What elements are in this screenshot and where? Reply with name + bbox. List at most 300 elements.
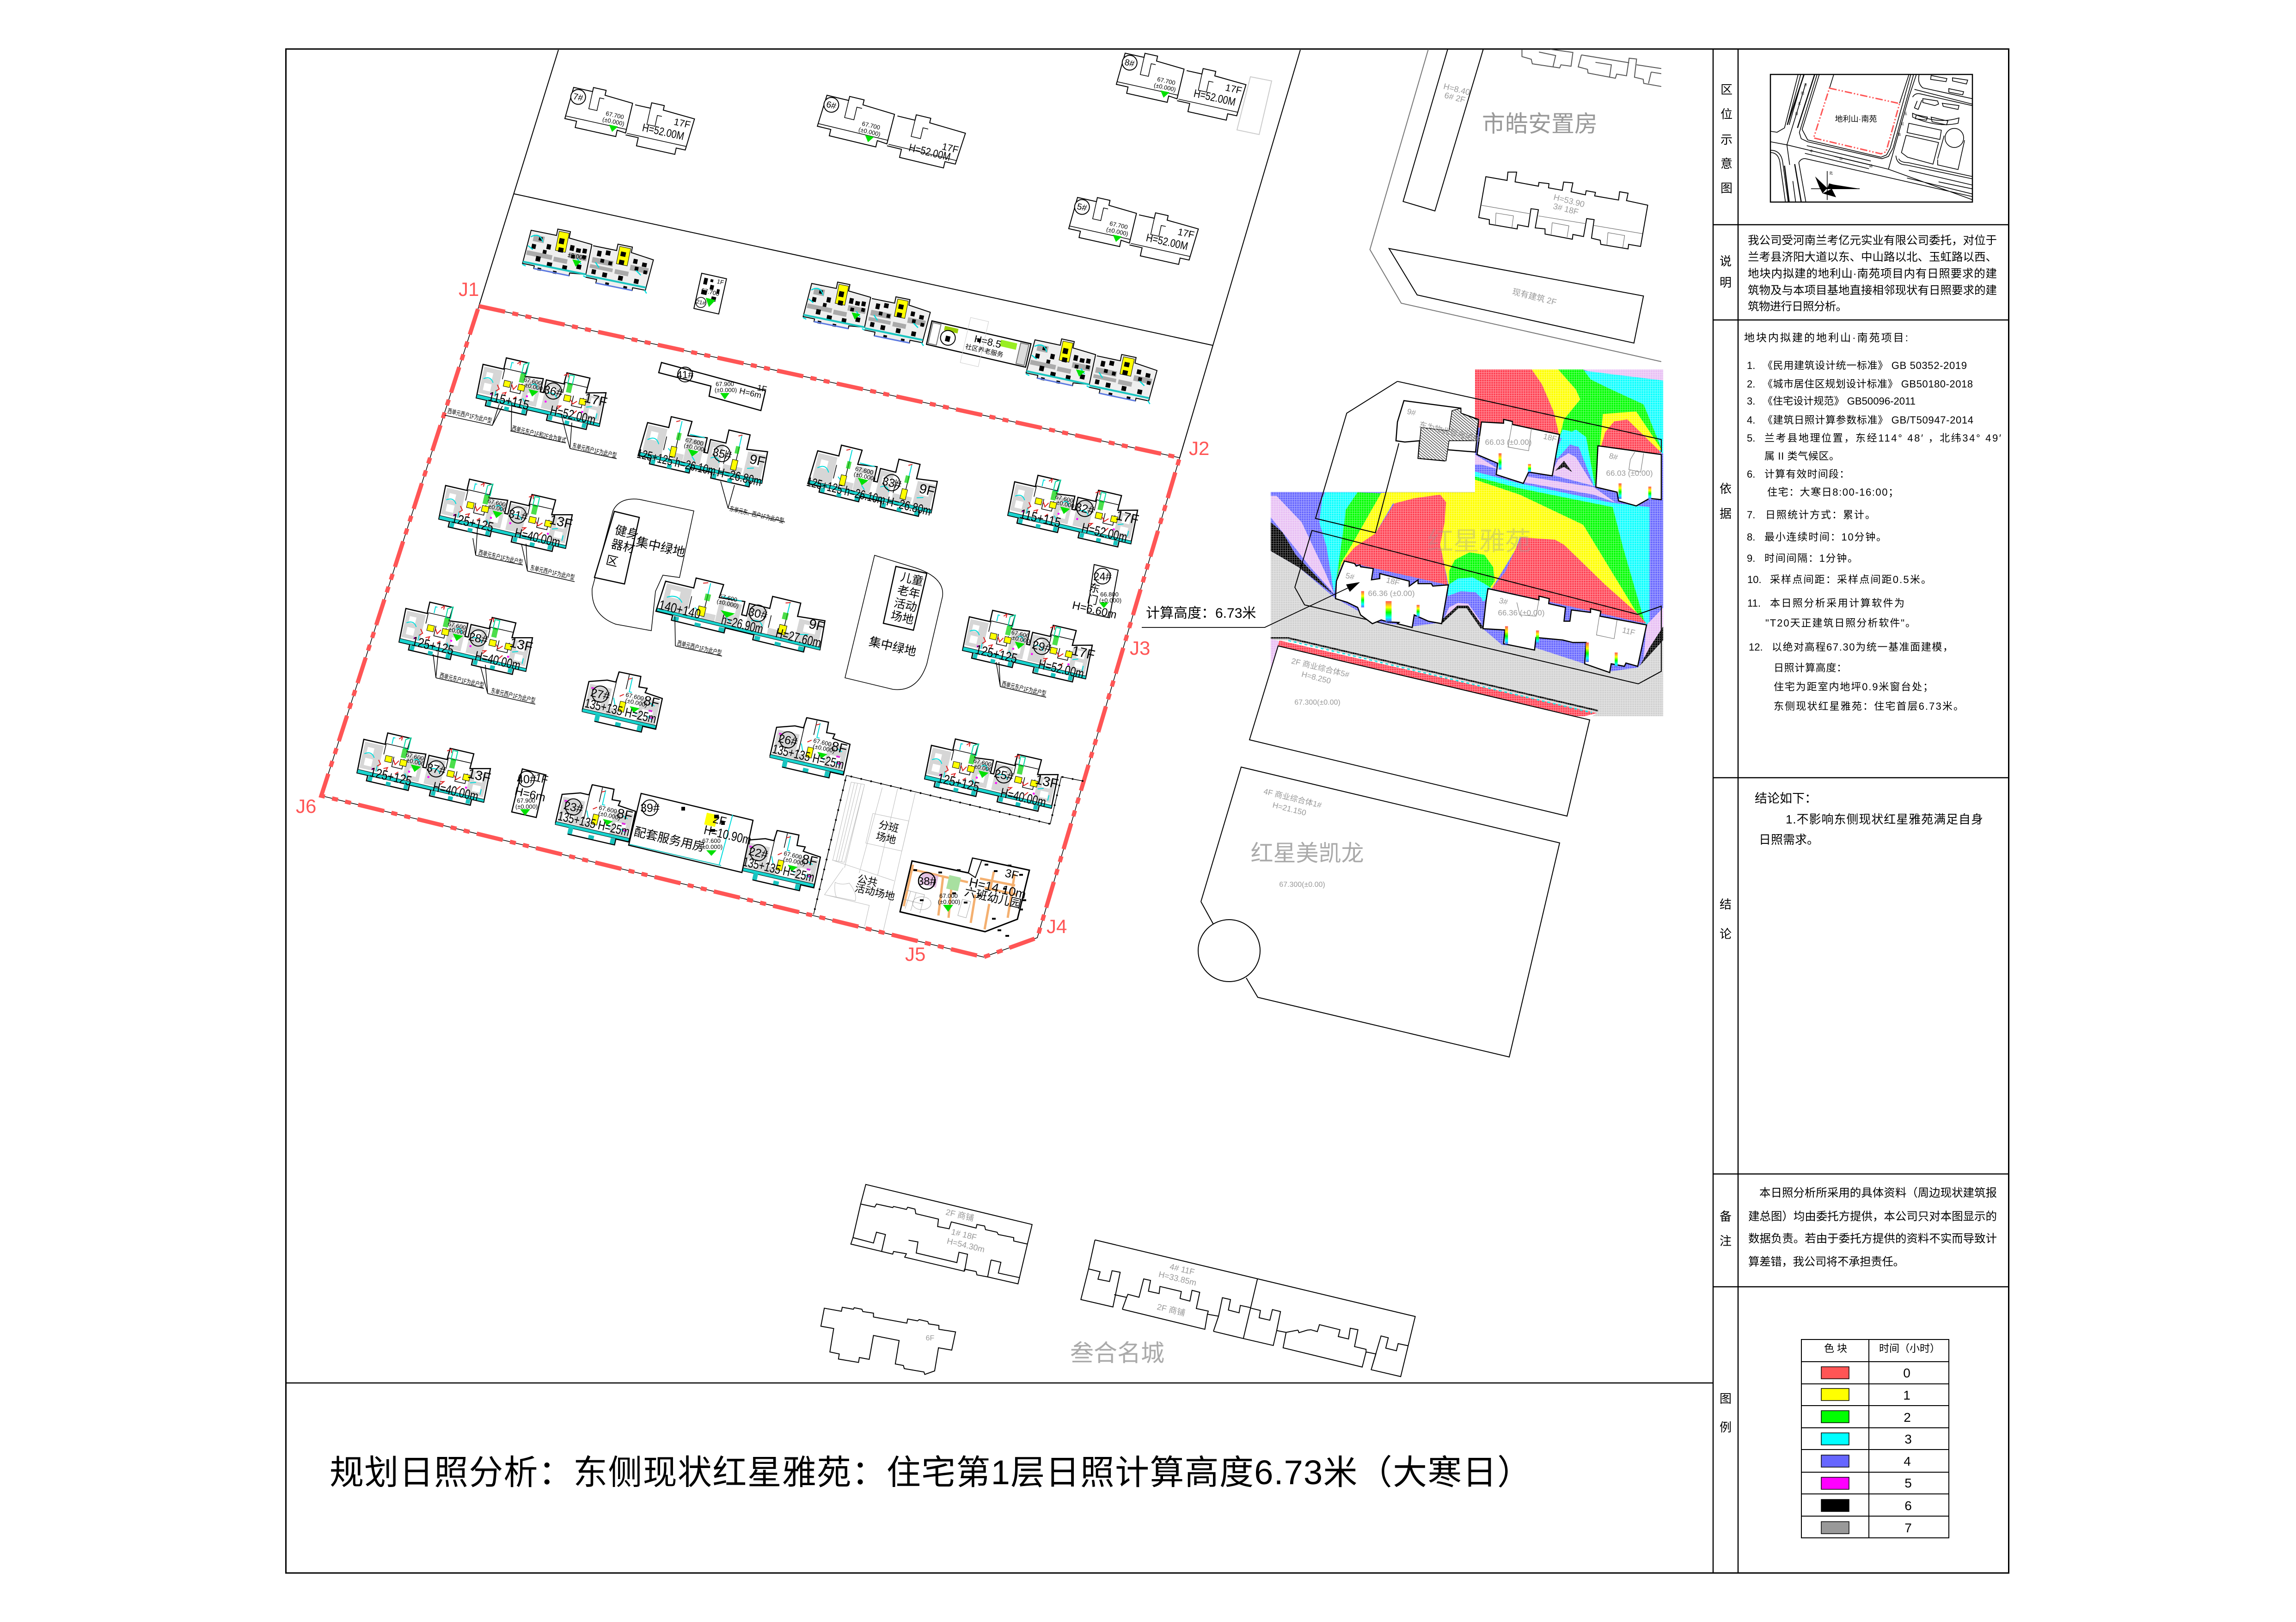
building 40#: H=6m (514, 785, 547, 804)
building 5# north: H=52.00M (1145, 232, 1189, 253)
residential building 37#: 13F (466, 766, 492, 786)
remarks: 数据负责。若由于委托方提供的资料不实而导致计 (1748, 1232, 1997, 1245)
grey outbuilding (1237, 77, 1272, 135)
drawing title: 规划日照分析：东侧现状红星雅苑：住宅第1层日照计算高度6.73米（大寒日） (330, 1453, 1531, 1492)
red land boundary J1 to J6 (321, 306, 1180, 957)
road labels: 济 (1804, 83, 1807, 87)
residential building 36#: H=52.00m (549, 403, 597, 428)
road labels: 路 (1898, 132, 1901, 136)
residential building 25#: 125+125 (936, 771, 981, 795)
residential building 35#: (±0.000) (683, 442, 707, 454)
sidebar row labels: 依 (1720, 482, 1732, 496)
commercial 1# name: 4F 商业综合体1# (1263, 787, 1322, 810)
conclusion: 日照需求。 (1759, 833, 1819, 847)
residential building 35#: 67.600 (685, 436, 704, 447)
road labels: 大 (1798, 101, 1801, 105)
boundary point labels (296, 278, 1209, 965)
green area west: fitness: 区 (605, 553, 619, 569)
building 24#: 66.800 (1100, 591, 1119, 598)
residential building 29#: 67.600 (1010, 629, 1030, 639)
building 5# north: 5# (1076, 202, 1088, 214)
building 8#: (±0.000) (1153, 81, 1176, 93)
residential building 27# (581, 665, 667, 735)
residential building 28#: H=40.00m (473, 649, 522, 673)
basis list: 以绝对高程67.30为统一基准面建模， (1772, 641, 1953, 653)
building 39# service house: 配套服务用房 (633, 824, 706, 854)
residential building 29#: 29# (1031, 639, 1053, 655)
residential building 26#: 135+135 H=25m (771, 742, 845, 772)
map north compass (1811, 171, 1860, 200)
remarks: 建总图）均由委托方提供，本公司只对本图显示的 (1748, 1210, 1997, 1223)
residential building 28#: 13F (508, 635, 534, 655)
callout texts: 西单元东户1F为此户型 (1001, 680, 1047, 697)
callout texts: 西单元西户1F为此户型 (447, 407, 493, 424)
building 24#: H=6.60m (1071, 599, 1118, 621)
rainbow time bars (1361, 453, 1651, 667)
residential building 37# (355, 728, 496, 808)
commercial 5# height: H=8.250 (1301, 670, 1332, 686)
basis list: 《建筑日照计算参数标准》 GB/T50947-2014 (1763, 414, 1973, 426)
building 7#: 7# (572, 92, 584, 104)
commercial 5# elevation: 67.300(±0.00) (1294, 699, 1341, 707)
building 6# labels: 67.700 (861, 120, 881, 131)
commercial 5# name: 2F 商业综合体5# (1291, 657, 1350, 680)
building 8# east (1596, 446, 1661, 506)
residential building 30# (655, 571, 829, 656)
map building labels: 5# (1345, 571, 1355, 582)
residential building 26# (768, 711, 854, 781)
row building east (1025, 333, 1159, 404)
callout texts: 西单元西户1F为此户型 (677, 639, 722, 657)
swatch 4 (1821, 1455, 1849, 1467)
remarks: 算差错，我公司将不承担责任。 (1748, 1255, 1904, 1268)
callout texts (439, 407, 1047, 704)
residential building 30#: h=26.90m (720, 613, 765, 637)
green area west: fitness: 健身 (613, 523, 640, 542)
label: 2F shop 2: 2F 商铺 (1156, 1302, 1186, 1318)
residential building 32#: 115+115 (1018, 507, 1062, 530)
residential building 22# (739, 824, 825, 894)
swatch 1 (1821, 1389, 1849, 1401)
basis list: 本日照分析采用计算软件为 (1770, 597, 1904, 609)
road labels: 虹 (1901, 122, 1904, 126)
residential building 25# (922, 734, 1063, 814)
residential building 31#: 125+125 (450, 511, 495, 535)
residential building 33#: (±0.000) (853, 470, 876, 482)
row building west (521, 223, 655, 294)
site name: 地利山·南苑 (1835, 115, 1877, 123)
residential building 33#: H=26.80m (885, 494, 933, 518)
residential building 36#: 67.600 (523, 376, 543, 387)
residential building 28#: 125+125 (410, 634, 455, 658)
building 24#: (±0.000) (1099, 597, 1121, 604)
building 24#: 门 (1086, 593, 1099, 607)
label: 4# height: H=33.85m (1157, 1270, 1197, 1288)
parcel outlines (1295, 381, 1661, 684)
property management hatch (1418, 408, 1479, 461)
building 9# (1396, 401, 1479, 461)
building 38# kindergarten: (±0.000) (938, 898, 960, 905)
building 39# service house: 2F (711, 812, 728, 828)
legend hour values: 4 (1904, 1454, 1911, 1468)
swatch 3 (1821, 1433, 1849, 1445)
commercial 1# height: H=21.150 (1272, 800, 1307, 817)
basis list: 东侧现状红星雅苑：住宅首层6.73米。 (1774, 700, 1964, 712)
residential building 29# (960, 605, 1100, 685)
residential building 31#: ±0.000 (488, 503, 507, 514)
residential building 37#: ±0.000 (406, 756, 425, 768)
residential building 27#: (±0.000) (625, 697, 648, 708)
legend hour values: 2 (1904, 1410, 1911, 1425)
residential building 31#: H=40.00m (513, 526, 562, 550)
building 24#: 东 (1088, 581, 1101, 595)
label: project name east: 市皓安置房 (1482, 111, 1598, 137)
residential building 37#: 37# (425, 761, 447, 778)
residential building 30#: 140+140 (657, 598, 702, 622)
callout texts: 东单元西户1F为此户型 (572, 442, 618, 459)
boundary point labels: J1 (459, 278, 479, 300)
building 40#: 1F (534, 771, 549, 786)
east neighbourhood parcel and buildings (1370, 49, 1661, 362)
green area west: fitness: 器材 (610, 537, 637, 556)
boundary point labels: J5 (905, 943, 925, 965)
residential building 32#: 67.600 (1054, 493, 1074, 504)
residential building 27#: 8F (642, 693, 661, 711)
commercial complex title: 红星美凯龙 (1250, 841, 1364, 866)
building 6# labels: (±0.000) (858, 126, 881, 138)
legend head: 色 块 (1824, 1343, 1847, 1354)
sidebar row labels: 明 (1720, 276, 1732, 289)
basis list: 4. (1747, 414, 1755, 426)
basis list: 12. (1749, 641, 1763, 653)
map building labels: 11F (1621, 626, 1636, 637)
building 21# (694, 273, 727, 314)
building 41#: 67.900 (716, 381, 734, 387)
residential building 31#: 67.600 (487, 498, 507, 508)
residential building 28#: 28# (467, 630, 489, 647)
sidebar row labels: 论 (1720, 927, 1732, 941)
residential building 32#: 17F (1114, 508, 1140, 528)
residential building 30#: (±0.000) (716, 597, 740, 609)
building 38# kindergarten: 67.000 (939, 892, 958, 899)
sidebar row labels: 结 (1720, 897, 1732, 911)
residential building 36#: 17F (583, 391, 609, 410)
residential building 22#: 22# (747, 845, 769, 862)
swatch 2 (1821, 1411, 1849, 1423)
callout texts: 西单元东户1F为此户型 (439, 671, 485, 689)
building 5# north: (±0.000) (1106, 226, 1129, 237)
swatch 7 (1821, 1522, 1849, 1534)
building 41#: (±0.000) (715, 387, 737, 393)
remarks: 本日照分析所采用的具体资料（周边现状建筑报 (1759, 1186, 1997, 1199)
building 8#: 8# (1124, 58, 1135, 69)
sidebar row labels: 注 (1720, 1234, 1732, 1248)
map building labels: 66.03 (±0.00) (1606, 469, 1653, 478)
kindergarten site fence and court: 活动场地 (854, 882, 896, 903)
map building labels: 9# (1406, 407, 1417, 418)
building 21#: 21# (696, 298, 706, 307)
inner building lines (1508, 422, 1644, 639)
road labels: 阳 (1801, 91, 1804, 95)
basis list: 最小连续时间：10分钟。 (1764, 531, 1886, 543)
building 40#: 40# (517, 773, 536, 786)
building 24# (1071, 565, 1121, 621)
residential building 36#: 36# (542, 383, 564, 400)
map building labels: 66.36 (±0.00) (1368, 589, 1415, 598)
basis list: 9. (1747, 553, 1755, 564)
residential building 37#: H=40.00m (431, 780, 480, 804)
building 41#: 41# (677, 369, 694, 381)
residential building 33#: 33# (881, 474, 903, 492)
legend table (1801, 1339, 1949, 1538)
label: 1# height: H=54.30m (946, 1236, 986, 1254)
kindergarten site fence and court (814, 775, 1083, 930)
explanation paragraph: 筑物进行日照分析。 (1748, 300, 1847, 313)
residential building 35#: 9F (748, 452, 767, 470)
building 7#: (±0.000) (602, 116, 625, 127)
map building labels: 66.03 (±0.00) (1485, 438, 1532, 447)
residential building 23# (554, 778, 640, 848)
residential building 31#: 13F (548, 512, 574, 532)
conclusion: 结论如下： (1755, 792, 1817, 805)
basis list: 日照计算高度： (1774, 662, 1847, 674)
building 18F north (1477, 419, 1560, 483)
commercial building 1# (1201, 767, 1560, 1057)
green area east: children (845, 555, 943, 690)
residential building 22#: 8F (800, 852, 819, 870)
north buildings without analysis detail (563, 49, 1272, 267)
basis list: "T20天正建筑日照分析软件"。 (1765, 617, 1916, 629)
sidebar row labels: 说 (1720, 254, 1732, 268)
residential building 29#: H=52.00m (1037, 657, 1085, 682)
commercial 1# elevation: 67.300(±0.00) (1279, 881, 1325, 889)
building 38# kindergarten: H=14.10m (968, 875, 1027, 902)
callout texts: 西单元东户1F和2F合为复式 (511, 424, 567, 444)
building 38# kindergarten: 3F (1004, 866, 1020, 882)
label: 3# floors: 3# 18F (1552, 202, 1580, 217)
residential building 31#: 31# (507, 507, 529, 524)
sidebar row labels: 区 (1720, 83, 1733, 97)
building 39# service house (629, 793, 753, 872)
sidebar row labels: 位 (1720, 107, 1733, 121)
map building labels (1345, 407, 1653, 637)
boundary point labels: J3 (1130, 637, 1150, 659)
basis list: 《城市居住区规划设计标准》 GB50180-2018 (1763, 378, 1973, 390)
community elderly service building: 社区养老服务 (965, 343, 1004, 358)
residential building 32# (1005, 470, 1144, 550)
kindergarten site fence and court: 场地 (875, 830, 897, 846)
sidebar row labels: 图 (1720, 1392, 1732, 1406)
green area east: children: 老年 (896, 584, 921, 601)
north mark: 北 (1829, 171, 1833, 175)
residential building 28#: ±0.000 (448, 626, 467, 637)
green area east: children: 场地 (889, 609, 915, 627)
residential building 30#: 30# (747, 605, 769, 622)
sidebar row labels: 据 (1720, 507, 1732, 521)
label: 6F: 6F (926, 1334, 935, 1342)
boundary black line (321, 306, 1180, 957)
map building labels: 66.36 (±0.00) (1498, 608, 1545, 617)
map frame (1770, 74, 1972, 202)
label: 3# height: H=53.90 (1553, 192, 1586, 209)
explanation paragraph: 兰考县济阳大道以东、中山路以北、玉虹路以西、 (1748, 251, 1997, 264)
legend hour values: 6 (1904, 1499, 1912, 1513)
building 3# east (1483, 589, 1647, 673)
residential building 23#: 23# (563, 799, 584, 816)
boundary point labels: J4 (1047, 915, 1067, 937)
residential building 27#: 135+135 H=25m (583, 696, 658, 726)
label: 6# floors: 6# 2F (1444, 91, 1466, 104)
basis list: 7. (1747, 509, 1755, 521)
basis list: 8. (1747, 531, 1755, 543)
building 7# (563, 83, 697, 157)
explanation paragraph (1748, 234, 1997, 313)
residential building 30#: H=27.60m (774, 626, 822, 651)
residential building 26#: 67.600 (813, 737, 832, 748)
commercial building 5# (1249, 646, 1590, 816)
commercial buildings east (1198, 646, 1590, 1057)
building 7#: 17F (673, 117, 692, 130)
road labels: 中 (1810, 149, 1813, 153)
kindergarten site fence and court: 分班 (877, 819, 900, 835)
swatch 5 (1821, 1477, 1849, 1489)
basis list: 兰考县地理位置，东经114° 48′ ，北纬34° 49′ (1764, 432, 2001, 444)
residential building 35#: 35# (711, 446, 733, 462)
green area west: fitness: 集中绿地 (635, 535, 686, 559)
residential building 36#: 115+115 (487, 389, 531, 413)
basis list: 3. (1747, 395, 1755, 407)
community elderly service building: H=8.5 (973, 333, 1003, 350)
residential building 28#: 67.600 (447, 621, 467, 631)
residential building 33#: 125+125 h=26.10m (805, 474, 887, 507)
residential building 30#: 67.600 (718, 592, 738, 603)
building 39# service house: H=10.90m (703, 823, 753, 848)
green area east: children: 活动 (893, 596, 918, 614)
residential building 27#: 67.600 (625, 691, 644, 702)
residential building 22#: 67.600 (783, 850, 802, 860)
callout texts: 东单元西户1F为此户型 (530, 564, 576, 581)
legend hour values: 0 (1903, 1366, 1910, 1380)
basis list: 5. (1747, 432, 1755, 444)
basis list: 日照统计方式：累计。 (1765, 509, 1875, 521)
basis list (1744, 332, 2001, 712)
residential building 25#: H=40.00m (999, 786, 1047, 810)
conclusion (1755, 792, 1983, 847)
residential building 25#: ±0.000 (974, 762, 993, 774)
red site outline on map (1813, 88, 1899, 154)
map building labels: 18F (1385, 576, 1401, 587)
residential building 29#: 17F (1071, 643, 1096, 663)
site roads and parcel lines (479, 50, 1300, 458)
conclusion: 1.不影响东侧现状红星雅苑满足自身 (1786, 812, 1983, 826)
residential building 30#: 9F (807, 616, 826, 634)
building 41#: 1F (756, 383, 768, 394)
building 39# service house: (±0.000) (700, 843, 722, 850)
legend hour values: 3 (1904, 1432, 1912, 1446)
residential building 33#: 67.600 (855, 465, 874, 476)
sunlight analysis colour map (1271, 369, 1663, 717)
building 38# kindergarten: 六班幼儿园 (963, 885, 1022, 911)
middle row buildings with dense detail (521, 223, 1159, 404)
row building west: ±0.000 (567, 251, 587, 262)
calculation height callout: 计算高度：6.73米 (1146, 606, 1256, 621)
residential building 35# (636, 411, 771, 490)
building 8#: 67.700 (1157, 76, 1176, 86)
residential building 23#: 8F (615, 806, 634, 824)
south neighbourhood buildings (821, 1185, 1415, 1376)
residential building 25#: 67.600 (973, 757, 992, 768)
label: south neighbourhood name: 叁合名城 (1070, 1340, 1164, 1366)
building 40# (512, 769, 549, 817)
residential building 23#: 67.600 (598, 804, 618, 815)
sidebar row labels: 例 (1720, 1420, 1732, 1434)
building 5# east (1335, 561, 1448, 627)
residential building 25#: 13F (1034, 772, 1060, 792)
building 39# service house: 39# (640, 802, 660, 815)
residential building 22#: 135+135 H=25m (741, 854, 816, 885)
residential building 27#: 27# (589, 686, 611, 703)
basis list: 属 II 类气候区。 (1764, 450, 1839, 462)
boundary point labels: J6 (296, 795, 316, 817)
basis list: 住宅：大寒日8:00-16:00； (1767, 486, 1898, 498)
residential building 32#: ±0.000 (1056, 499, 1075, 510)
basis list: 10. (1747, 574, 1762, 585)
sidebar row labels: 意 (1720, 157, 1733, 171)
building 38# kindergarten: 38# (918, 875, 937, 888)
building 8# (1114, 49, 1248, 123)
residential building 37#: 125+125 (368, 765, 413, 789)
residential building 36# (474, 353, 612, 433)
location map (1770, 74, 1972, 202)
building 6# labels (817, 96, 963, 165)
residential building 26#: 26# (777, 732, 799, 749)
building 6# (815, 91, 967, 171)
map building labels: 3# (1498, 596, 1509, 607)
residential building 23#: 135+135 H=25m (557, 809, 631, 839)
building 40#: 67.900 (517, 797, 535, 804)
building 40#: (±0.000) (515, 803, 538, 810)
residential building 31# (436, 474, 577, 554)
swatch 0 (1821, 1367, 1849, 1379)
sidebar row labels: 示 (1720, 133, 1733, 147)
callout texts: 西单元东户1F为此户型 (478, 548, 524, 566)
residential building 37#: 67.600 (405, 751, 425, 762)
residential building 33# (805, 439, 942, 519)
building 5# north (1066, 193, 1200, 267)
legend hour values: 7 (1904, 1521, 1912, 1535)
road labels: 路 (1869, 164, 1873, 168)
residential building 26#: 8F (830, 739, 849, 757)
building 6# labels: 6# (825, 100, 837, 111)
residential building 35#: H=26.80m (716, 465, 763, 489)
residential building 29#: 125+125 (974, 642, 1019, 666)
basis list: 地块内拟建的地利山·南苑项目: (1744, 332, 1908, 344)
building 7#: H=52.00M (641, 122, 685, 143)
legend hour values: 1 (1903, 1388, 1910, 1402)
callout texts: 东单元东、西户1F为此户型 (729, 505, 784, 524)
buildings over analysis map (1295, 381, 1661, 684)
residential building 29#: ±0.000 (1011, 634, 1031, 645)
explanation paragraph: 筑物及与本项目基地直接相邻现状有日照要求的建 (1748, 284, 1997, 297)
road labels: 道 (1795, 111, 1798, 116)
basis list: 时间间隔：1分钟。 (1764, 553, 1858, 564)
building 39# service house: 67.600 (702, 837, 721, 844)
label: existing building: 现有建筑 2F (1511, 287, 1557, 307)
community elderly service building (924, 309, 1034, 377)
swatch 6 (1821, 1499, 1849, 1511)
row building middle (802, 277, 932, 346)
green area east: children: 儿童 (899, 571, 925, 588)
